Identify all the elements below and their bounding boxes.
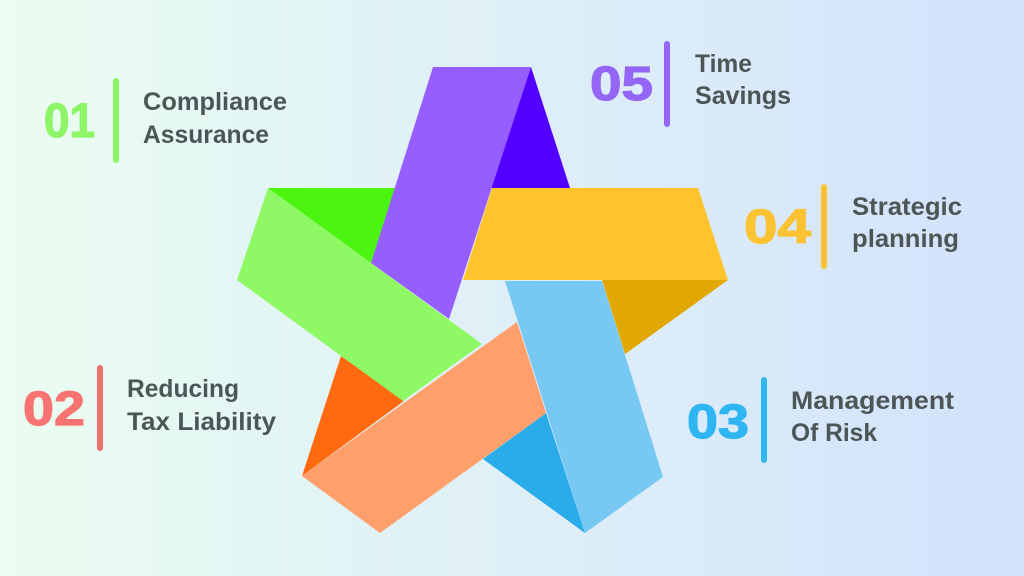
- fold: orange shadow: [302, 356, 404, 476]
- number 01: 01: [44, 95, 95, 148]
- divider bar 01: [113, 78, 119, 163]
- fold: blue shadow: [483, 413, 585, 533]
- item 03: Management Of Risk: [687, 377, 955, 463]
- number 05: 05: [590, 58, 653, 111]
- item 05: Time Savings: Savings: [695, 82, 791, 110]
- label 03: Management: [791, 387, 955, 415]
- band: yellow: [463, 188, 728, 280]
- band: light green: [237, 188, 482, 401]
- band: peach: [302, 322, 546, 533]
- divider bar 04: [821, 184, 827, 269]
- divider bar 03: [761, 377, 767, 463]
- item 05: Time Savings: [590, 41, 791, 127]
- label 05: Time: [695, 50, 752, 78]
- divider bar 02: [97, 365, 103, 451]
- band: light blue: [505, 281, 663, 533]
- item 04: Strategic planning: planning: [852, 225, 959, 253]
- item 01: Compliance Assurance: Assurance: [143, 121, 269, 149]
- number 03: 03: [687, 396, 749, 449]
- star diagram: [237, 67, 728, 533]
- number 04: 04: [744, 201, 811, 254]
- item 04: Strategic planning: [744, 184, 962, 269]
- label 04: Strategic: [852, 193, 962, 221]
- divider bar 05: [664, 41, 670, 127]
- band: purple: [371, 67, 531, 319]
- fold: yellow shadow: [602, 280, 728, 354]
- label 02: Reducing: [127, 375, 239, 403]
- label 01: Compliance: [143, 88, 287, 116]
- fold: purple shadow: [490, 67, 570, 188]
- item 02: Reducing Tax Liability: Tax Liability: [127, 408, 276, 436]
- fold: green shadow: [268, 188, 396, 263]
- number 02: 02: [23, 383, 85, 436]
- item 01: Compliance Assurance: [44, 78, 287, 163]
- item 03: Management Of Risk: Of Risk: [791, 419, 877, 447]
- item 02: Reducing Tax Liability: [23, 365, 276, 451]
